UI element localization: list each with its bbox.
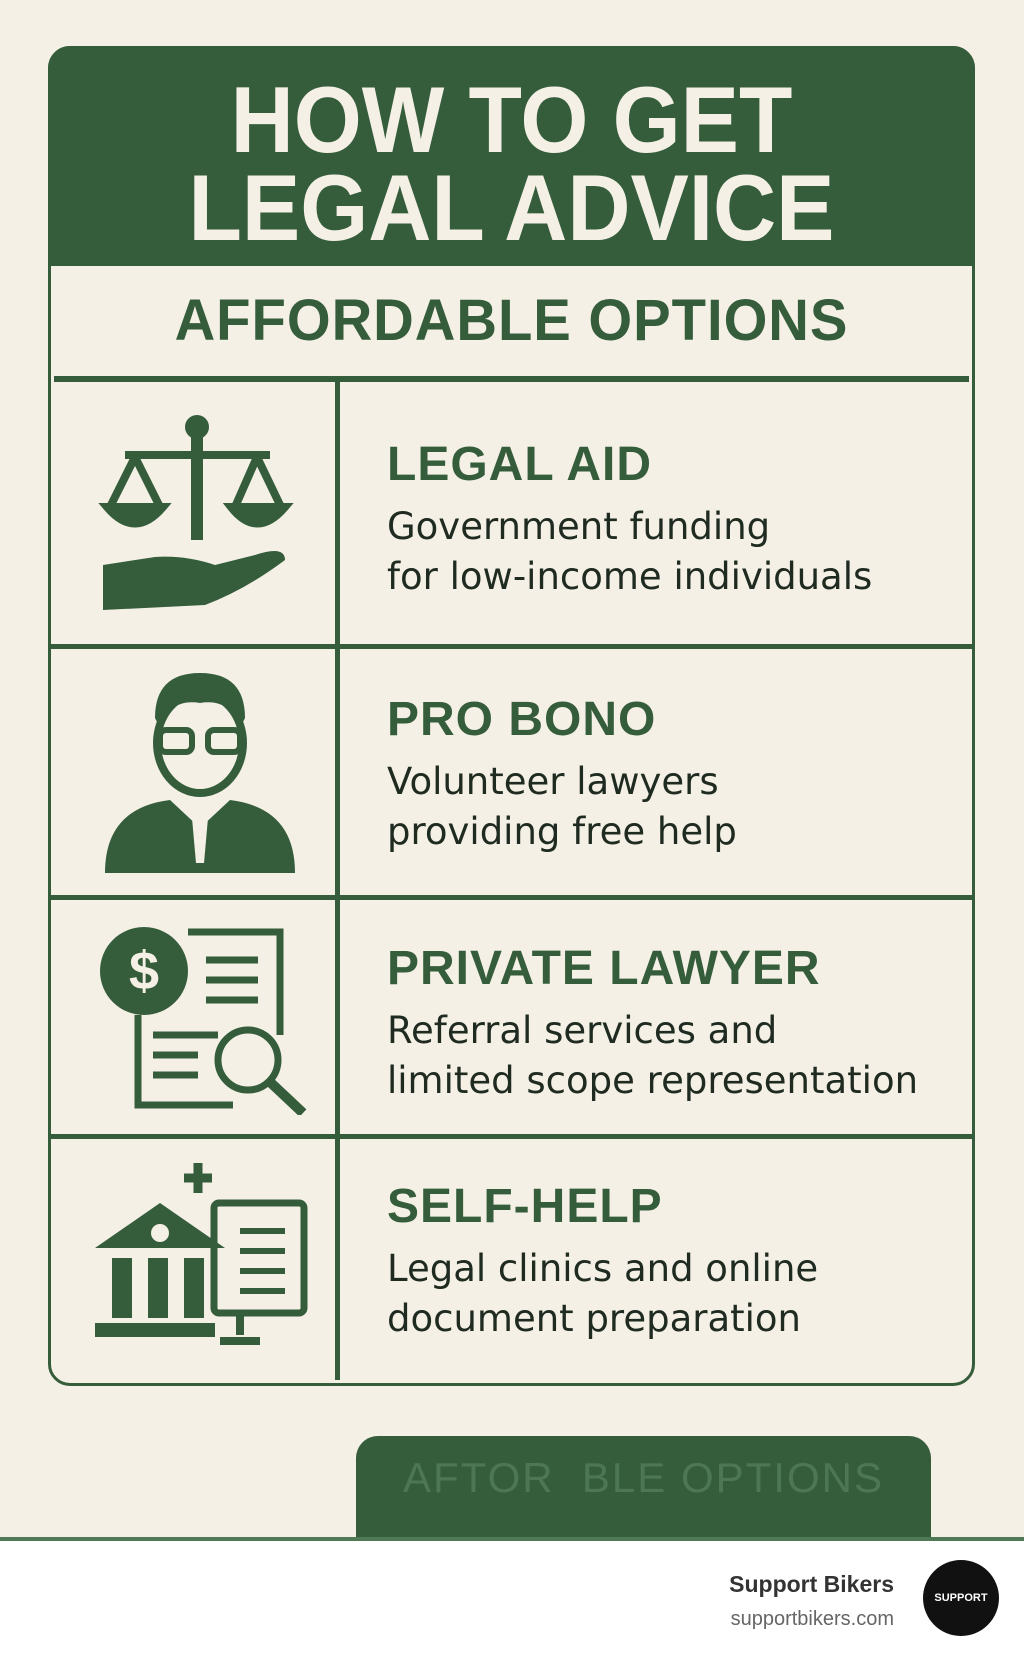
footer (0, 1541, 1024, 1666)
icon: lawyer (105, 673, 295, 873)
text: legal aid: for low-income individuals (387, 555, 872, 598)
title banner: LEGAL ADVICE (188, 155, 835, 260)
text: pro bono (387, 693, 737, 853)
text: pro bono: Volunteer lawyers (387, 760, 719, 803)
subtitle (54, 266, 969, 382)
logo: SUPPORT (934, 1592, 988, 1604)
text: legal aid: Government funding (387, 505, 770, 548)
bottom tab: AFTOR BLE OPTIONS (403, 1454, 884, 1501)
text: private lawyer (387, 942, 918, 1102)
text: private lawyer: limited scope representation (387, 1059, 918, 1102)
text: legal aid (387, 438, 872, 598)
row: pro bono (105, 673, 737, 873)
bottom tab (356, 1436, 931, 1539)
text: pro bono: providing free help (387, 810, 737, 853)
icon: scales in hand (98, 415, 294, 610)
subtitle: AFFORDABLE OPTIONS (175, 288, 848, 353)
text: self-help: Legal clinics and online (387, 1247, 818, 1290)
divider column (335, 380, 340, 1380)
text: self-help (387, 1180, 818, 1340)
main panel (48, 46, 975, 1386)
title banner: HOW TO GET (231, 67, 792, 172)
row: legal aid (98, 415, 872, 610)
text: pro bono: PRO BONO (387, 693, 656, 746)
text: legal aid: LEGAL AID (387, 438, 652, 491)
row dividers (48, 644, 975, 649)
icon: courthouse and computer (95, 1163, 308, 1345)
row: self-help (95, 1163, 818, 1345)
footer brand text: supportbikers.com (731, 1608, 894, 1630)
footer divider (0, 1537, 1024, 1541)
panel frame (48, 46, 975, 1386)
text: private lawyer: PRIVATE LAWYER (387, 942, 821, 995)
text: self-help: SELF-HELP (387, 1180, 663, 1233)
footer brand text: Support Bikers (729, 1571, 894, 1597)
icon: money document search (100, 927, 306, 1115)
icon: money document search: $ (129, 941, 159, 1001)
footer brand text (729, 1571, 894, 1630)
text: private lawyer: Referral services and (387, 1009, 777, 1052)
text: self-help: document preparation (387, 1297, 801, 1340)
row: private lawyer (100, 927, 918, 1115)
logo (923, 1560, 999, 1636)
title banner (48, 46, 975, 266)
